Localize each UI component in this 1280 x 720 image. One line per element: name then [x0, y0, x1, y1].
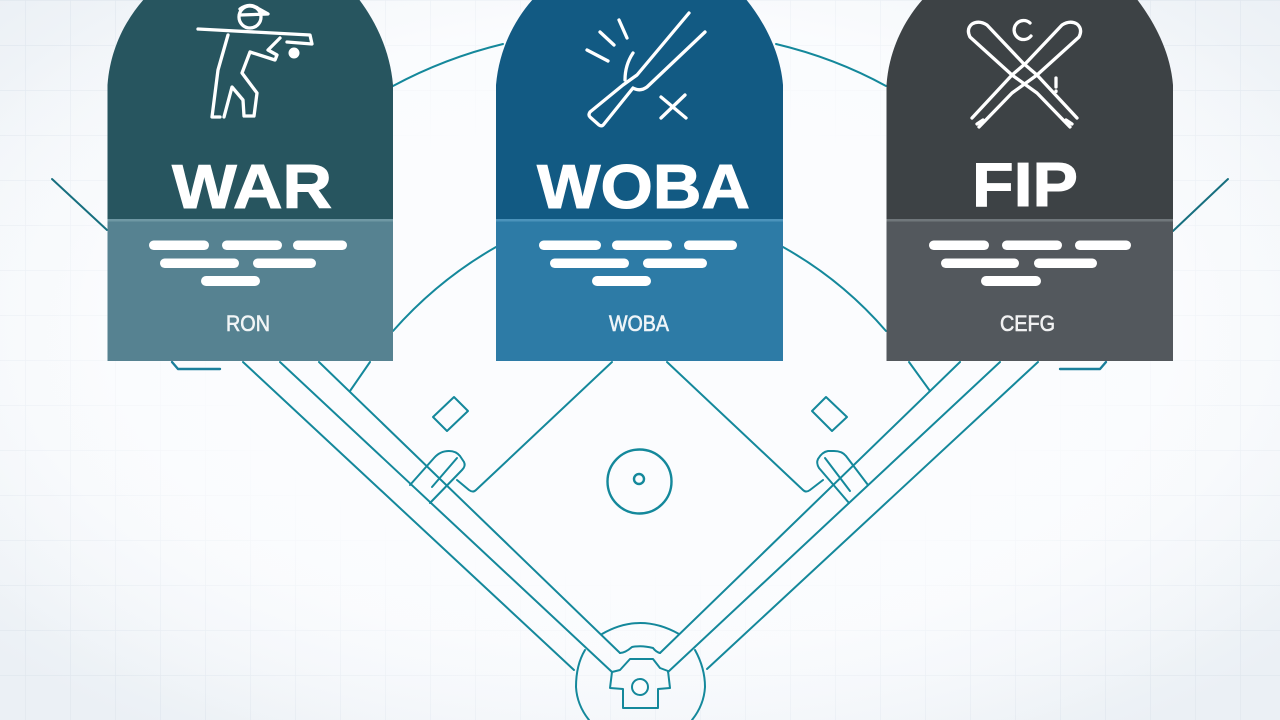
icon: crossed bats	[968, 21, 1081, 127]
FIP heading: FIP	[972, 151, 1078, 220]
left marker square	[433, 397, 468, 431]
card divider highlights	[108, 219, 1173, 222]
WOBA card header	[496, 0, 783, 221]
left foul line bands	[243, 362, 620, 672]
icon: bat with sparks	[587, 13, 705, 126]
panel: WAR card	[108, 0, 393, 361]
WAR sublabel: RON	[226, 311, 270, 336]
WAR heading: WAR	[172, 153, 332, 222]
panel: FIP card	[886, 0, 1173, 361]
WOBA description bars	[539, 240, 737, 286]
first base bag	[410, 451, 465, 503]
WOBA card lower section	[496, 219, 783, 361]
right foul line bands	[660, 362, 1038, 672]
outfield arcs	[52, 44, 1228, 369]
WAR card header	[108, 0, 393, 221]
right marker square	[812, 397, 847, 431]
WAR description bars	[149, 240, 347, 286]
home circle	[576, 623, 705, 720]
infield diamond lines	[457, 362, 823, 492]
FIP sublabel: CEFG	[1000, 311, 1055, 336]
icon: batter	[198, 6, 312, 117]
WOBA heading: WOBA	[537, 153, 750, 222]
WOBA sublabel: WOBA	[609, 311, 669, 336]
FIP card lower section	[886, 219, 1173, 361]
pitcher's mound	[608, 450, 672, 514]
home plate	[610, 646, 670, 708]
FIP card header	[886, 0, 1173, 221]
third base bag	[817, 451, 868, 503]
FIP description bars	[929, 240, 1131, 286]
panel: WOBA card	[496, 0, 783, 361]
WAR card lower section	[108, 219, 393, 361]
